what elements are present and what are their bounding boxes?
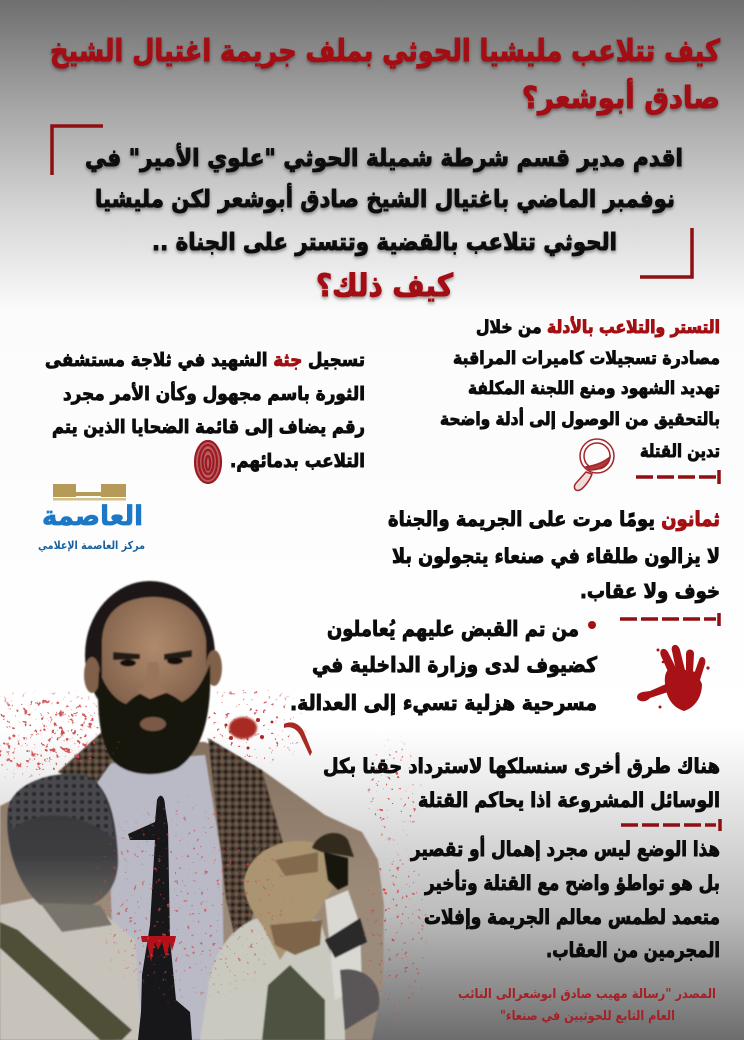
dashed divider 1 [636, 470, 719, 484]
illustration: victim and armed militants [0, 581, 430, 1040]
rear militant [312, 833, 379, 1030]
intro paragraph [85, 143, 683, 256]
text block: treated as guests: مسرحية هزلية تسيء إلى العدالة. [290, 691, 597, 715]
text block: cover-up of evidence: التستر والتلاعب بالأدلة من خلال [476, 316, 720, 338]
source note: المصدر "رسالة مهيب صادق ابوشعرالى النائب [458, 987, 716, 1002]
text block: cover-up of evidence: تدين القتلة [640, 442, 720, 462]
text block: treated as guests: كضيوف لدى وزارة الداخلية في [312, 653, 598, 677]
source note: العام التابع للحوثيين في صنعاء" [500, 1009, 675, 1024]
intro paragraph: اقدم مدير قسم شرطة شميلة الحوثي "علوي الأمير" في [85, 143, 683, 172]
bullet [588, 621, 596, 629]
text block: eighty days: ثمانون يومًا مرت على الجريمة والجناة [388, 507, 720, 531]
intro paragraph: نوفمبر الماضي باغتيال الشيخ صادق أبوشعر لكن مليشيا [95, 183, 675, 213]
corner bracket bottom right [640, 228, 692, 277]
icon: magnifying glass [574, 439, 614, 490]
rifle with blood drip [128, 796, 192, 1040]
blood splatter backdrop [0, 690, 430, 1040]
middle militant [200, 841, 345, 1040]
blood speckles over figures [90, 740, 390, 1030]
text block: body registered in morgue: التلاعب بدمائهم. [230, 451, 365, 472]
text block: body registered in morgue: الثورة باسم مجهول وكأن الأمر مجرد [63, 382, 365, 405]
text block: treated as guests [290, 617, 598, 715]
logo wordmark: العاصمة [42, 501, 143, 532]
text block: body registered in morgue [45, 350, 365, 472]
logo: Al-Asimah media centre [38, 484, 145, 552]
title [50, 34, 720, 116]
left militant [0, 774, 142, 1040]
text block: collusion [410, 835, 720, 962]
intro paragraph: الحوثي تتلاعب بالقضية وتتستر على الجناة .. [152, 228, 617, 256]
question heading: كيف ذلك؟ [316, 268, 454, 304]
portrait of the man [0, 581, 384, 1040]
logo gold emblem [53, 484, 126, 500]
dashed divider 3 [621, 819, 720, 831]
text block: cover-up of evidence [440, 316, 720, 462]
source note [458, 987, 716, 1024]
corner bracket top left [52, 126, 103, 175]
blood splash near the shoulder [224, 717, 312, 756]
icon: bloody hand print [637, 645, 710, 711]
text block: eighty days [388, 507, 720, 603]
logo caption: مركز العاصمة الإعلامي [38, 539, 145, 552]
blood splash top left [0, 700, 95, 770]
icon: fingerprint [195, 441, 221, 483]
dashed divider 2 [620, 613, 719, 626]
text block: eighty days: خوف ولا عقاب. [580, 579, 720, 603]
text block: body registered in morgue: تسجيل جثة الشهيد في ثلاجة مستشفى [45, 350, 365, 371]
text block: other ways [323, 752, 720, 812]
text block: body registered in morgue: رقم يضاف إلى قائمة الضحايا الذين يتم [52, 417, 365, 438]
title: صادق أبوشعر؟ [522, 78, 720, 116]
text block: treated as guests: من تم القبض عليهم يُعاملون [327, 617, 579, 641]
text block: cover-up of evidence: مصادرة تسجيلات كاميرات المراقبة [453, 349, 720, 369]
